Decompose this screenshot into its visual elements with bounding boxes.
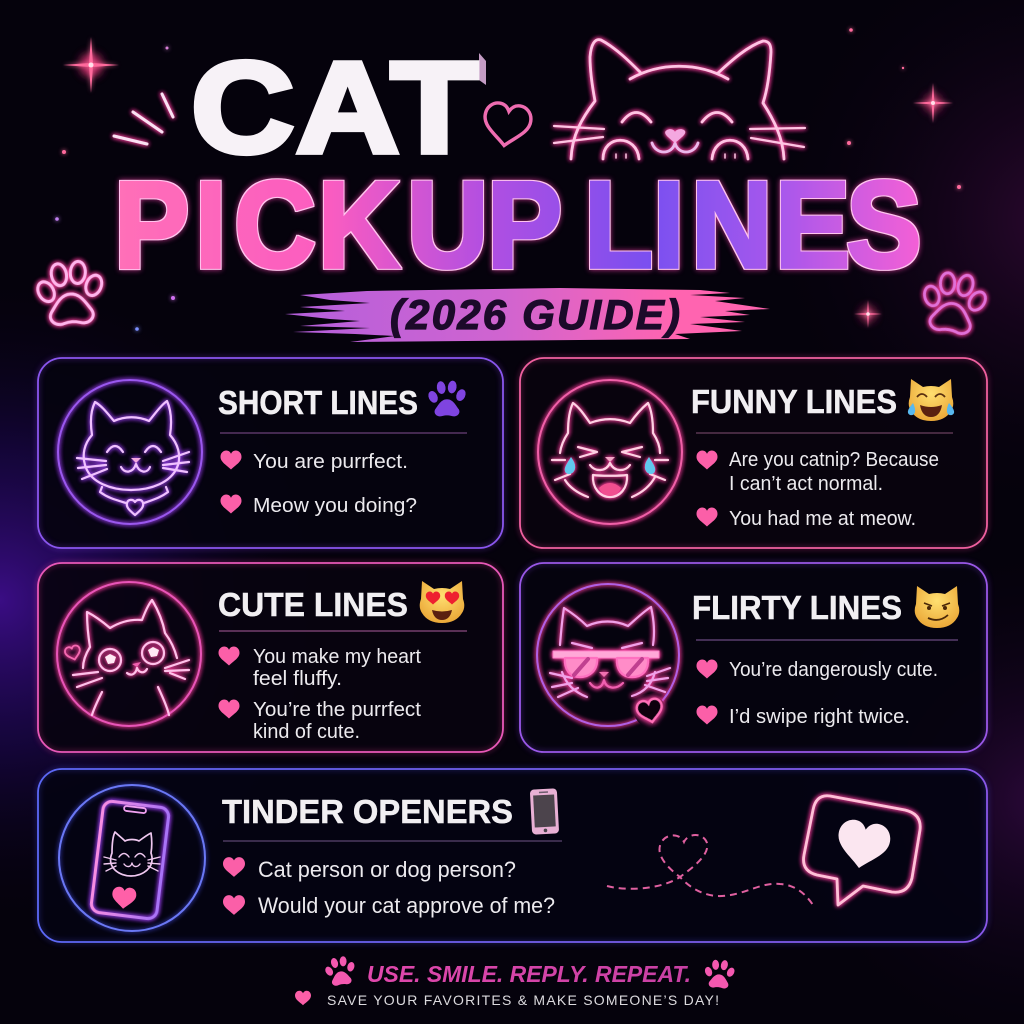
footer: [295, 954, 737, 1008]
icon: laughing cat with tears: [538, 380, 682, 524]
bullet: fluffy: feel fluffy.: [253, 668, 342, 690]
bullet: purrfect kind: You’re the purrfect: [253, 699, 421, 721]
icon: smirking cat emoji: [915, 586, 959, 628]
panel: tinder openers: [38, 769, 987, 942]
icon: footer heart: [295, 991, 311, 1005]
subtitle brush stroke: [285, 288, 770, 342]
icon: right paw: [916, 267, 992, 337]
heading: SHORT LINES: [218, 384, 418, 421]
bullet: fluffy: [218, 646, 421, 690]
bullet: fluffy: You make my heart: [253, 646, 421, 668]
bullet: catnip: I can’t act normal.: [729, 473, 883, 495]
bullet: meow you doing: Meow you doing?: [253, 495, 417, 517]
icon: laughing cat emoji: [908, 379, 954, 421]
icon: heart speech bubble: [804, 796, 920, 905]
icon: heart-eyes cat emoji: [420, 581, 464, 623]
bullet: purrfect kind: [218, 699, 421, 743]
heading: FLIRTY LINES: [692, 589, 902, 626]
heading: CUTE LINES: [218, 586, 408, 623]
bullet: cat or dog: Cat person or dog person?: [258, 857, 516, 882]
footer headline: USE. SMILE. REPLY. REPEAT.: [367, 961, 691, 987]
panel: cute lines: [38, 563, 503, 752]
panel: funny lines: [520, 358, 987, 548]
icon: left paw: [33, 259, 108, 326]
bullet: catnip: Are you catnip? Because: [729, 449, 939, 471]
decorative stars and dots: [55, 28, 961, 331]
heading: FUNNY LINES: [691, 383, 897, 420]
icon: outline heart: [481, 101, 533, 149]
bullet: catnip: [696, 449, 939, 495]
bullet: you are purrfect: You are purrfect.: [253, 451, 408, 473]
bullet: swipe right: I’d swipe right twice.: [729, 706, 910, 728]
icon: cool cat with sunglasses: [537, 584, 679, 726]
title: CAT: CAT: [191, 35, 478, 180]
bullet: purrfect kind: kind of cute.: [253, 721, 360, 743]
icon: phone with cat: [59, 785, 205, 931]
bullet: dangerously cute: You’re dangerously cute.: [729, 659, 938, 681]
icon: purple paw: [427, 380, 467, 416]
dashed heart trail: [607, 835, 813, 905]
footer tagline: SAVE YOUR FAVORITES & MAKE SOMEONE’S DAY!: [327, 992, 719, 1008]
bullet: you had me at meow: You had me at meow.: [729, 508, 916, 530]
icon: phone emoji: [530, 788, 559, 835]
panel: flirty lines: [520, 563, 987, 752]
bullet: approve: Would your cat approve of me?: [258, 893, 555, 918]
icon: right footer paw: [702, 958, 737, 989]
heading: TINDER OPENERS: [222, 793, 513, 830]
icon: sparkly-eyed cat: [57, 582, 201, 726]
subtitle text: (2026 GUIDE): [390, 291, 680, 338]
burst lines: [114, 94, 173, 144]
icon: smiling cat with collar: [58, 380, 202, 524]
icon: peeking neon cat: [554, 40, 805, 159]
icon: outline heart on circle: [634, 695, 666, 727]
title: PICKUP LINES: PICKUP LINES: [0, 156, 921, 293]
panel: short lines: [38, 358, 503, 548]
icon: left footer paw: [322, 954, 358, 987]
